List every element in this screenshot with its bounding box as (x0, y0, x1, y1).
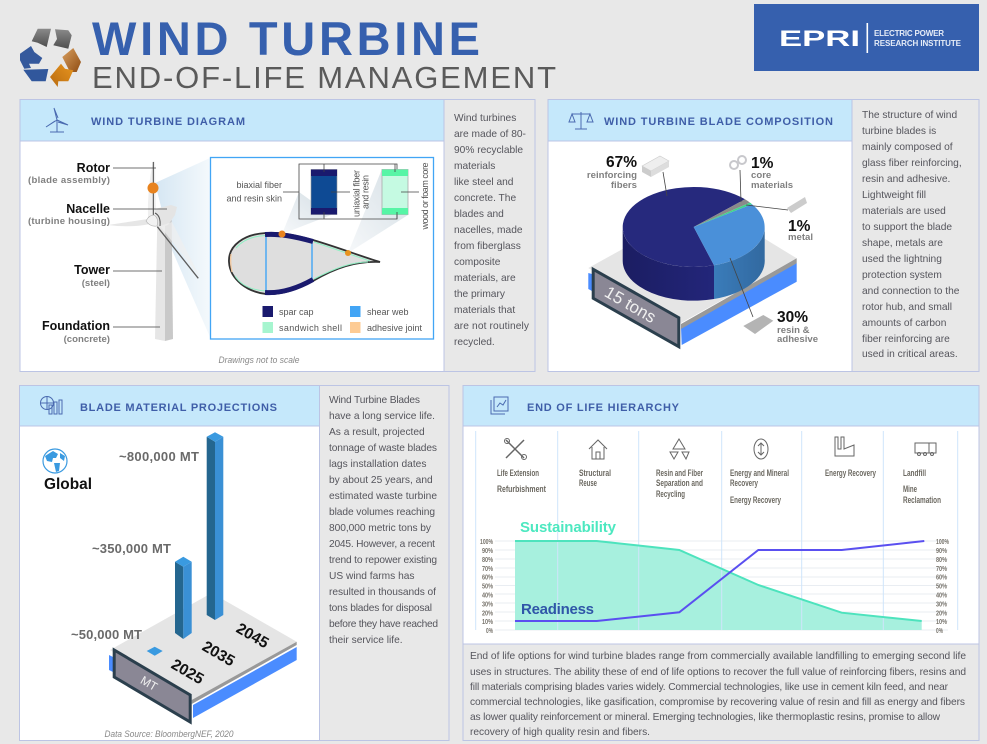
pie labels: reinforcing (587, 170, 637, 181)
side text: the primary (454, 289, 506, 300)
side text: materials that (454, 305, 515, 316)
icon: scale (569, 112, 593, 129)
side text: turbine blades is (862, 126, 936, 137)
side text: nacelles, made (454, 225, 523, 236)
turbine illustration (108, 161, 200, 341)
EPRI logo: EPRI (779, 26, 860, 51)
turbine labels (28, 161, 167, 345)
side text: are not routinely (454, 321, 530, 332)
turbine labels: (blade assembly) (28, 175, 110, 186)
axis labels: 30% (936, 600, 947, 608)
side text: Lightweight fill (862, 190, 926, 201)
side text: composite (454, 257, 501, 268)
turbine labels: Tower (74, 263, 110, 277)
side text: As a result, projected (329, 427, 425, 438)
icon: core material (730, 156, 746, 169)
hierarchy labels: Reuse (579, 478, 597, 489)
title: END-OF-LIFE MANAGEMENT (92, 60, 556, 95)
icon: globe chart (40, 396, 62, 414)
turbine labels: Nacelle (66, 202, 110, 216)
hierarchy labels: Life Extension (497, 468, 539, 479)
laminate detail: and resin (360, 175, 370, 209)
legend: adhesive joint (367, 323, 423, 333)
bar labels: 2045 (233, 620, 272, 652)
side text: amounts of carbon (862, 318, 946, 329)
axis labels: 70% (482, 564, 493, 573)
legend: spar cap (279, 307, 314, 317)
axis labels: 60% (482, 572, 493, 582)
side text: 800,000 metric tons by (329, 523, 432, 534)
turbine labels: Foundation (42, 319, 110, 333)
pie labels: 1% (788, 218, 811, 235)
bar labels (71, 449, 272, 688)
hierarchy labels: Resin and Fiber (656, 468, 703, 479)
panel: wind turbine diagram (20, 100, 535, 372)
side text: tons blades for disposal (329, 603, 432, 614)
data source: Data Source: BloombergNEF, 2020 (104, 729, 234, 739)
hierarchy labels: Recovery (730, 478, 758, 489)
turbine labels: (steel) (82, 278, 110, 289)
laminate detail: uniaxial fiber (352, 170, 362, 217)
isometric platform (109, 593, 297, 722)
side text (862, 110, 962, 360)
EPRI logo: RESEARCH INSTITUTE (874, 39, 962, 48)
turbine labels: Rotor (77, 161, 110, 175)
axis labels: 20% (936, 608, 947, 618)
icon: globe (43, 449, 67, 473)
axis labels: 10% (936, 617, 947, 626)
hierarchy labels: Energy and Mineral (730, 468, 789, 479)
isometric platform: MT (138, 673, 161, 694)
axis labels: 0% (486, 626, 493, 635)
axis labels: 30% (482, 600, 493, 608)
hierarchy labels: Energy Recovery (730, 495, 781, 506)
icon: energy loop (754, 439, 768, 459)
title: WIND TURBINE (92, 12, 480, 65)
chart: Sustainability (520, 519, 617, 536)
axis labels: 100% (936, 537, 949, 546)
pie labels: 1% (751, 155, 774, 172)
axis labels: 90% (936, 546, 947, 555)
bar 2035 (175, 557, 192, 639)
pie labels: metal (788, 232, 813, 243)
heading: WIND TURBINE BLADE COMPOSITION (604, 116, 833, 128)
side text: blades and (454, 209, 504, 220)
bar 2025 (147, 647, 163, 656)
title (92, 12, 556, 95)
panel: blade material projections (19, 386, 449, 740)
heading: WIND TURBINE DIAGRAM (91, 116, 245, 128)
side text: blade volumes reaching (329, 507, 435, 518)
pie labels: 67% (606, 154, 637, 171)
legend (262, 306, 423, 333)
body text: as lower quality reinforcement or mineral. Emerging technologies, like thermoplastic resins, promise to allow (470, 712, 941, 723)
hierarchy labels (497, 468, 941, 506)
axis labels: 100% (480, 537, 493, 546)
axis labels: 50% (936, 582, 947, 590)
axis labels: 80% (482, 555, 493, 564)
side text: rotor hub, and small (862, 302, 952, 313)
bar labels: 2025 (168, 656, 207, 688)
pie labels: fibers (611, 180, 637, 191)
legend: shear web (367, 307, 409, 317)
icon: resin slab (743, 315, 773, 334)
pie labels: 30% (777, 309, 808, 326)
icon: house (589, 440, 607, 459)
side text: Wind Turbine Blades (329, 395, 420, 406)
side text: Wind turbines (454, 113, 516, 124)
icon: turbine (46, 108, 68, 132)
side text: are made of 80- (454, 129, 526, 140)
laminate detail (226, 162, 430, 230)
pie labels: adhesive (777, 334, 818, 345)
side text: recycled. (454, 337, 495, 348)
bar labels: ~50,000 MT (71, 627, 142, 642)
chart (476, 431, 958, 635)
body text: End of life options for wind turbine blades range from commercially available landfilling to emerging second life (470, 651, 966, 662)
side text (329, 395, 438, 646)
axis labels: 80% (936, 555, 947, 564)
EPRI logo (754, 4, 979, 71)
side text: used the lightning (862, 254, 942, 265)
side text (454, 113, 530, 348)
side text: mainly composed of (862, 142, 953, 153)
side text: concrete. The (454, 193, 516, 204)
hierarchy labels: Landfill (903, 468, 926, 479)
icon: metal beam (787, 197, 807, 213)
side text: lags installation dates (329, 459, 426, 470)
bar labels: 2035 (199, 638, 238, 670)
icon: tools (504, 438, 526, 460)
side text: before they have reached (329, 619, 438, 630)
side text: trend to repower existing (329, 555, 437, 566)
body text: recovery of high quality resin and fibers. (470, 727, 650, 738)
side text: 90% recyclable (454, 145, 523, 156)
hierarchy labels: Separation and (656, 478, 703, 489)
axis labels: 10% (482, 617, 493, 626)
bar labels: ~350,000 MT (92, 541, 171, 556)
side text: materials, are (454, 273, 516, 284)
side text: materials are used (862, 206, 946, 217)
side text: protection system (862, 270, 942, 281)
axis labels: 60% (936, 572, 947, 582)
side text: The structure of wind (862, 110, 957, 121)
side text: US wind farms has (329, 571, 414, 582)
body text: uses in structures. The ability these of end of life options to recover the full value of reinforcing fibers, resins and (470, 667, 966, 678)
blade cross-section box (210, 158, 434, 339)
turbine labels: (turbine housing) (28, 216, 110, 227)
side text: to support the blade (862, 222, 952, 233)
side text: their service life. (329, 635, 403, 646)
3D pie chart (623, 187, 765, 301)
hierarchy labels: Recycling (656, 489, 685, 500)
pie labels: core (751, 170, 771, 181)
axis labels: 50% (482, 582, 493, 590)
heading: END OF LIFE HIERARCHY (527, 402, 680, 414)
body text: fill materials comprising blades varies widely. Commercial technologies, like use in cement kiln feed, and near (470, 682, 949, 693)
laminate detail: biaxial fiber (236, 180, 282, 190)
icon: truck (915, 443, 936, 456)
bar labels: ~800,000 MT (119, 449, 199, 464)
axis labels: 20% (482, 608, 493, 618)
side text: like steel and (454, 177, 514, 188)
side text: materials (454, 161, 495, 172)
icon: layered charts (491, 397, 508, 414)
side text: shape, metals are (862, 238, 943, 249)
laminate detail: wood or foam core (420, 162, 430, 230)
side text: 2045. However, a recent (329, 539, 435, 550)
side text: fiber reinforcing are (862, 334, 950, 345)
side text: and connection to the (862, 286, 960, 297)
axis labels: 40% (482, 590, 493, 600)
laminate detail: and resin skin (226, 194, 282, 204)
side text: have a long service life. (329, 411, 435, 422)
hierarchy labels: Reclamation (903, 495, 941, 506)
icon: factory (835, 437, 854, 456)
turbine labels: (concrete) (64, 334, 110, 345)
EPRI logo: ELECTRIC POWER (874, 29, 944, 38)
icon: recycling (670, 439, 689, 459)
body text: commercial technologies, like gasification, compromise by recovering value of resin and fill as energy and fibers (470, 697, 965, 708)
callout fade (155, 158, 210, 337)
chart: Readiness (521, 601, 594, 618)
note: Drawings not to scale (218, 355, 300, 365)
axis labels: 40% (936, 590, 947, 600)
scale platform: 15 tons (601, 283, 659, 327)
axis labels (480, 537, 949, 635)
axis labels: 0% (936, 626, 943, 635)
leader lines (663, 170, 788, 317)
scale platform (588, 203, 797, 347)
pie labels: resin & (777, 325, 810, 336)
side text: tonnage of waste blades (329, 443, 437, 454)
heading: BLADE MATERIAL PROJECTIONS (80, 402, 277, 414)
hierarchy labels: Structural (579, 468, 611, 479)
hierarchy labels: Mine (903, 484, 917, 495)
panel: blade composition (548, 100, 979, 372)
hierarchy labels: Energy Recovery (825, 468, 876, 479)
bar 2045 (207, 432, 223, 620)
recycling logo (20, 29, 81, 87)
side text: used in critical areas. (862, 349, 958, 360)
body text (470, 651, 966, 738)
hierarchy labels: Refurbishment (497, 484, 547, 495)
pie labels (587, 154, 818, 345)
icon: fiber stack (642, 156, 669, 177)
side text: resulted in thousands of (329, 587, 436, 598)
region label: Global (44, 476, 92, 493)
axis labels: 70% (936, 564, 947, 573)
pie labels: materials (751, 180, 793, 191)
side text: by about 25 years, and (329, 475, 433, 486)
legend: sandwich shell (279, 323, 342, 333)
side text: glass fiber reinforcing, (862, 158, 962, 169)
panel: end of life hierarchy (463, 386, 979, 740)
axis labels: 90% (482, 546, 493, 555)
side text: resin and adhesive. (862, 174, 950, 185)
side text: from fiberglass (454, 241, 521, 252)
side text: estimated waste turbine (329, 491, 437, 502)
